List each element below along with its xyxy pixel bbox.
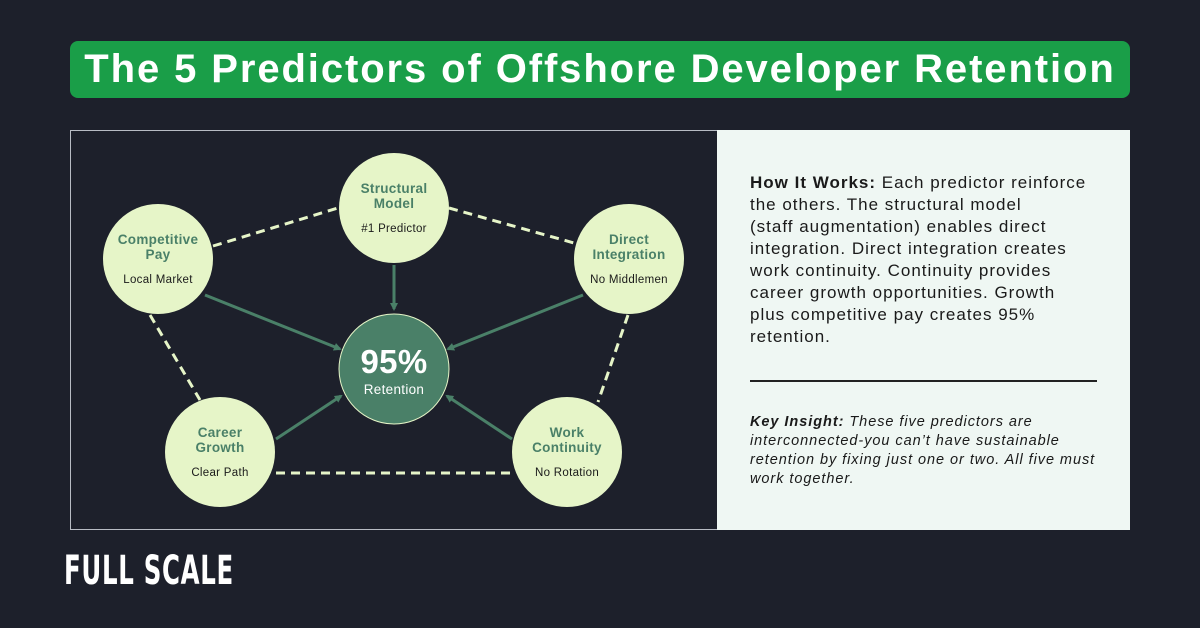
text: key insight: interconnected-you can’t have sustainable [750, 433, 1060, 449]
node: competitive pay: Local Market [123, 274, 193, 286]
text: how it works: retention. [750, 327, 831, 346]
text: how it works: work continuity. Continuity provides [750, 261, 1051, 280]
text: how it works: (staff augmentation) enables direct [750, 217, 1046, 236]
text: how it works: the others. The structural model [750, 195, 1022, 214]
node: direct integration: No Middlemen [590, 274, 667, 286]
node: structural model: #1 Predictor [361, 222, 426, 234]
dashed connectors [150, 208, 628, 472]
node: structural model: Model [373, 196, 414, 210]
center: 95% retention [338, 314, 448, 424]
node: structural model [338, 152, 448, 262]
node: work continuity [512, 396, 622, 506]
logo: FULL SCALE [64, 548, 234, 594]
node: career growth: Clear Path [191, 466, 248, 478]
node: direct integration [574, 204, 684, 314]
text: key insight [750, 414, 1095, 487]
node: competitive pay: Pay [145, 246, 170, 262]
node: career growth: Growth [195, 440, 244, 454]
text: key insight: retention by fixing just one or two. All five must [750, 452, 1095, 468]
node: work continuity: No Rotation [534, 466, 599, 478]
node: work continuity: Continuity [532, 440, 602, 454]
node: structural model: Structural [360, 180, 427, 196]
text: how it works [750, 173, 1086, 346]
node: direct integration: Direct [608, 232, 649, 246]
text: how it works: career growth opportunities. Growth [750, 283, 1055, 302]
node: competitive pay [102, 204, 212, 314]
node: direct integration: Integration [592, 246, 665, 262]
node: career growth: Career [197, 424, 242, 440]
text: key insight: work together. [750, 471, 855, 487]
node: competitive pay: Competitive [117, 232, 198, 246]
node: work continuity: Work [549, 424, 584, 440]
panel: diagram [70, 130, 718, 530]
node: career growth [164, 396, 274, 506]
title: The 5 Predictors of Offshore Developer Retention [84, 47, 1116, 91]
arrows [204, 264, 582, 438]
text: how it works: How It Works: Each predictor reinforce [750, 173, 1086, 192]
panel: explanation [717, 130, 1130, 530]
text: how it works: plus competitive pay creates 95% [750, 305, 1035, 324]
text: key insight: Key Insight: These five predictors are [750, 414, 1033, 430]
text: how it works: integration. Direct integration creates [750, 239, 1067, 258]
center: 95% retention: Retention [363, 382, 424, 396]
center: 95% retention: 95% [360, 342, 427, 380]
